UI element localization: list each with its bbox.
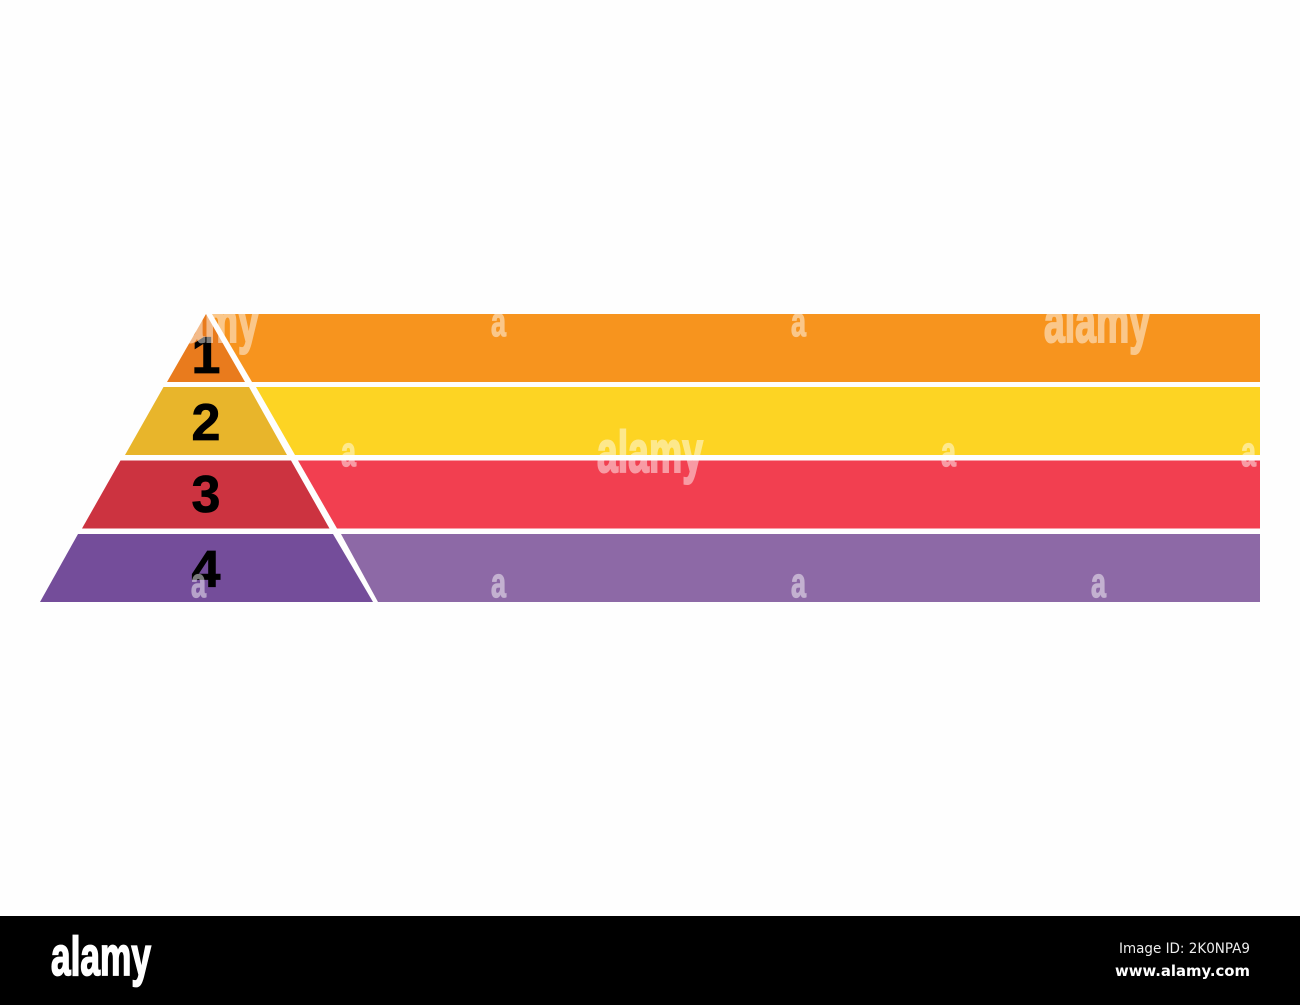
watermark word, top left: alamy (152, 290, 259, 355)
watermark word, centre: alamy (597, 420, 703, 485)
pyramid level 3 (82, 460, 330, 528)
pyramid numbers (192, 327, 221, 599)
watermark letters: a (941, 428, 956, 475)
watermark letters: a (791, 559, 806, 606)
watermark letters: a (191, 559, 206, 606)
website url: www.alamy.com (1115, 962, 1250, 980)
number 3: 3 (192, 466, 220, 524)
watermark letters: a (341, 428, 356, 475)
panel: pyramid (40, 314, 373, 602)
bar 2: yellow (256, 387, 1260, 455)
footer logo: alamy (51, 925, 151, 987)
bar 3: red (298, 460, 1260, 528)
watermark letters (191, 298, 1256, 606)
bar 4: purple (341, 534, 1260, 602)
footer band (0, 916, 1300, 1005)
pyramid level 1 (167, 314, 245, 382)
watermark word, top right: alamy (1044, 290, 1150, 355)
number 2: 2 (192, 394, 220, 452)
watermark letters: a (791, 298, 806, 345)
pyramid level 2 (125, 387, 287, 455)
watermarks (152, 290, 1256, 606)
image id: Image ID: 2K0NPA9 (1119, 941, 1250, 957)
number 1: 1 (192, 327, 220, 385)
pyramid level 4 (40, 534, 373, 602)
number 4: 4 (192, 541, 221, 599)
watermark letters: a (1091, 559, 1106, 606)
watermark letters: a (1241, 428, 1256, 475)
bar 1: orange (212, 314, 1260, 382)
watermark letters: a (491, 559, 506, 606)
panel: horizontal bars (212, 314, 1260, 602)
watermark letters: a (491, 298, 506, 345)
